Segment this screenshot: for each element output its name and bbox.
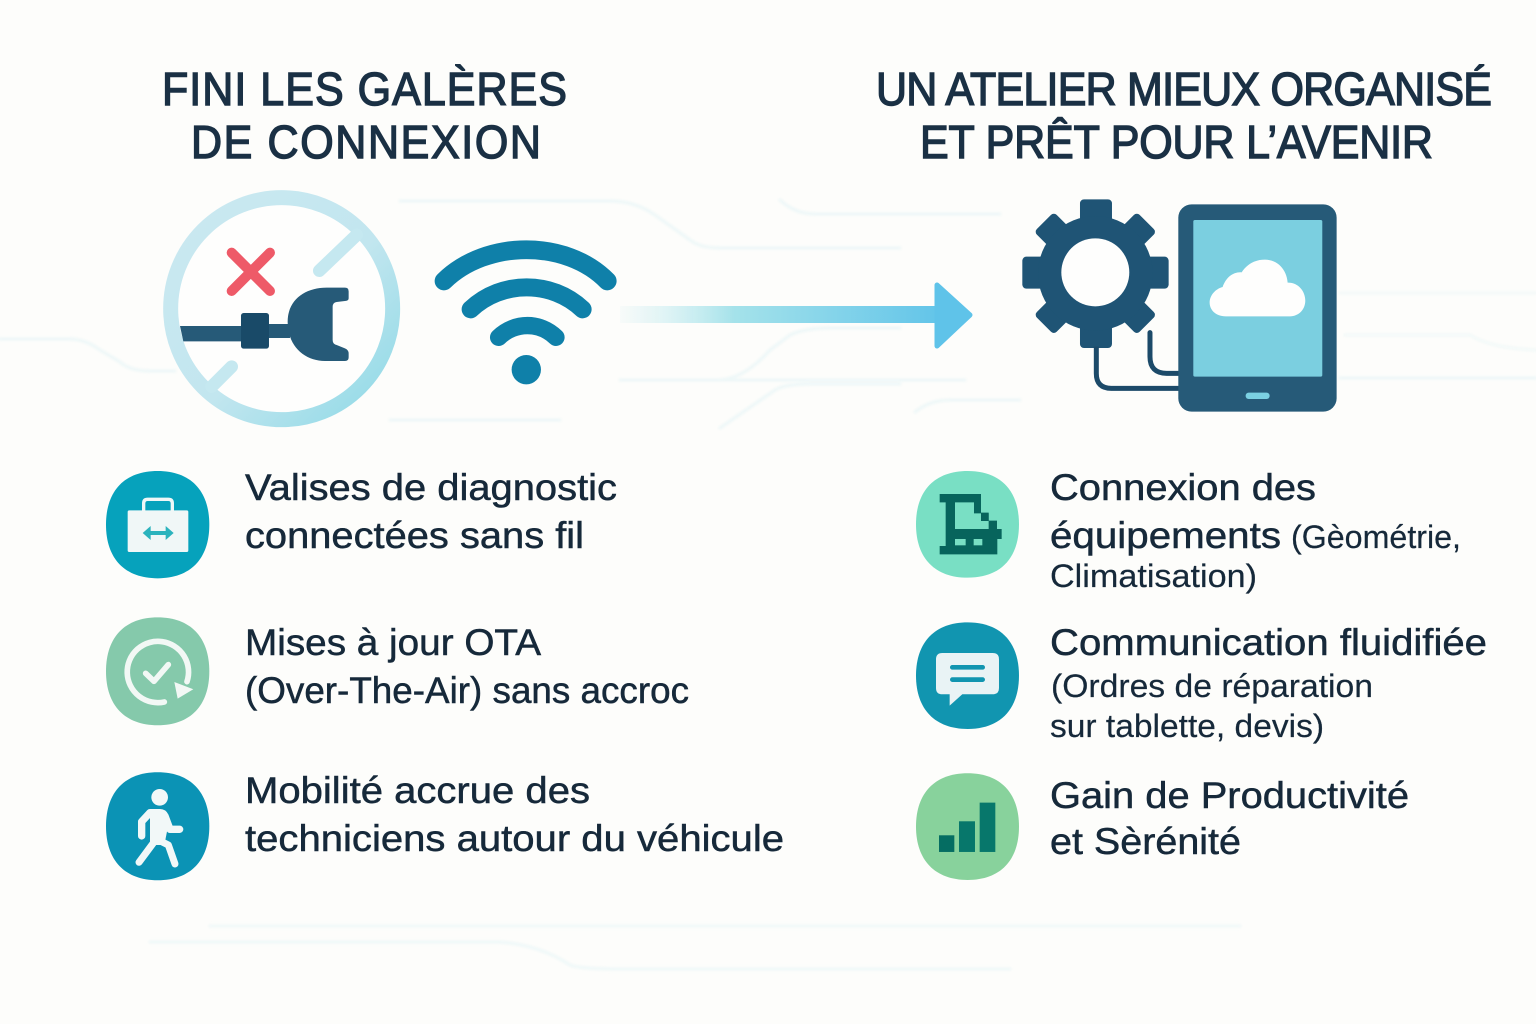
title: left heading: DE CONNEXION bbox=[191, 116, 541, 168]
list item: mobilité bbox=[106, 770, 784, 880]
title: right heading: ET PRÊT POUR L’AVENIR bbox=[920, 116, 1433, 168]
list item: valises de diagnostic: connectées sans fil bbox=[245, 515, 584, 556]
icon: toolbox bbox=[106, 471, 209, 578]
list item: connexion des équipements: Connexion des bbox=[1050, 467, 1316, 508]
title: right heading: UN ATELIER MIEUX ORGANISÉ bbox=[876, 63, 1492, 115]
list item: communication fluidifiée: Communication fluidifiée bbox=[1050, 622, 1487, 663]
list item: connexion des équipements: (Gèométrie, bbox=[1291, 519, 1461, 555]
list item: communication fluidifiée: sur tablette, devis) bbox=[1050, 708, 1324, 744]
title: left heading bbox=[162, 63, 567, 168]
list item: connexion des équipements: Climatisation) bbox=[1050, 558, 1257, 594]
icon: equipment bbox=[916, 471, 1019, 578]
list item: gain de productivité: et Sèrénité bbox=[1050, 821, 1241, 862]
list item: communication fluidifiée: (Ordres de réparation bbox=[1051, 668, 1373, 704]
list item: mises à jour OTA: (Over-The-Air) sans accroc bbox=[245, 670, 689, 711]
icon: wifi bbox=[444, 250, 607, 384]
list item: mobilité: techniciens autour du véhicule bbox=[245, 818, 784, 859]
icon: walking person bbox=[106, 772, 209, 880]
list item: mises à jour OTA: Mises à jour OTA bbox=[245, 622, 541, 663]
list item: valises de diagnostic bbox=[106, 467, 617, 578]
list item: communication fluidifiée bbox=[916, 622, 1487, 744]
icon: unplugged cable in crossed circle bbox=[171, 198, 393, 420]
arrow bbox=[620, 285, 970, 346]
list item: gain de productivité bbox=[916, 773, 1409, 880]
list item: mises à jour OTA bbox=[106, 617, 689, 725]
icon: gear connected to tablet with cloud bbox=[1022, 199, 1337, 412]
icon: bar chart bbox=[916, 773, 1019, 880]
list item: connexion des équipements bbox=[916, 467, 1461, 594]
list item: mobilité: Mobilité accrue des bbox=[245, 770, 590, 811]
icon: refresh check bbox=[106, 617, 209, 725]
list item: gain de productivité: Gain de Productivité bbox=[1050, 775, 1409, 816]
title: right heading bbox=[876, 63, 1492, 168]
title: left heading: FINI LES GALÈRES bbox=[162, 63, 567, 115]
icon: chat bubble bbox=[916, 622, 1019, 729]
list item: connexion des équipements: équipements bbox=[1050, 515, 1281, 556]
list item: valises de diagnostic: Valises de diagnostic bbox=[245, 467, 617, 508]
